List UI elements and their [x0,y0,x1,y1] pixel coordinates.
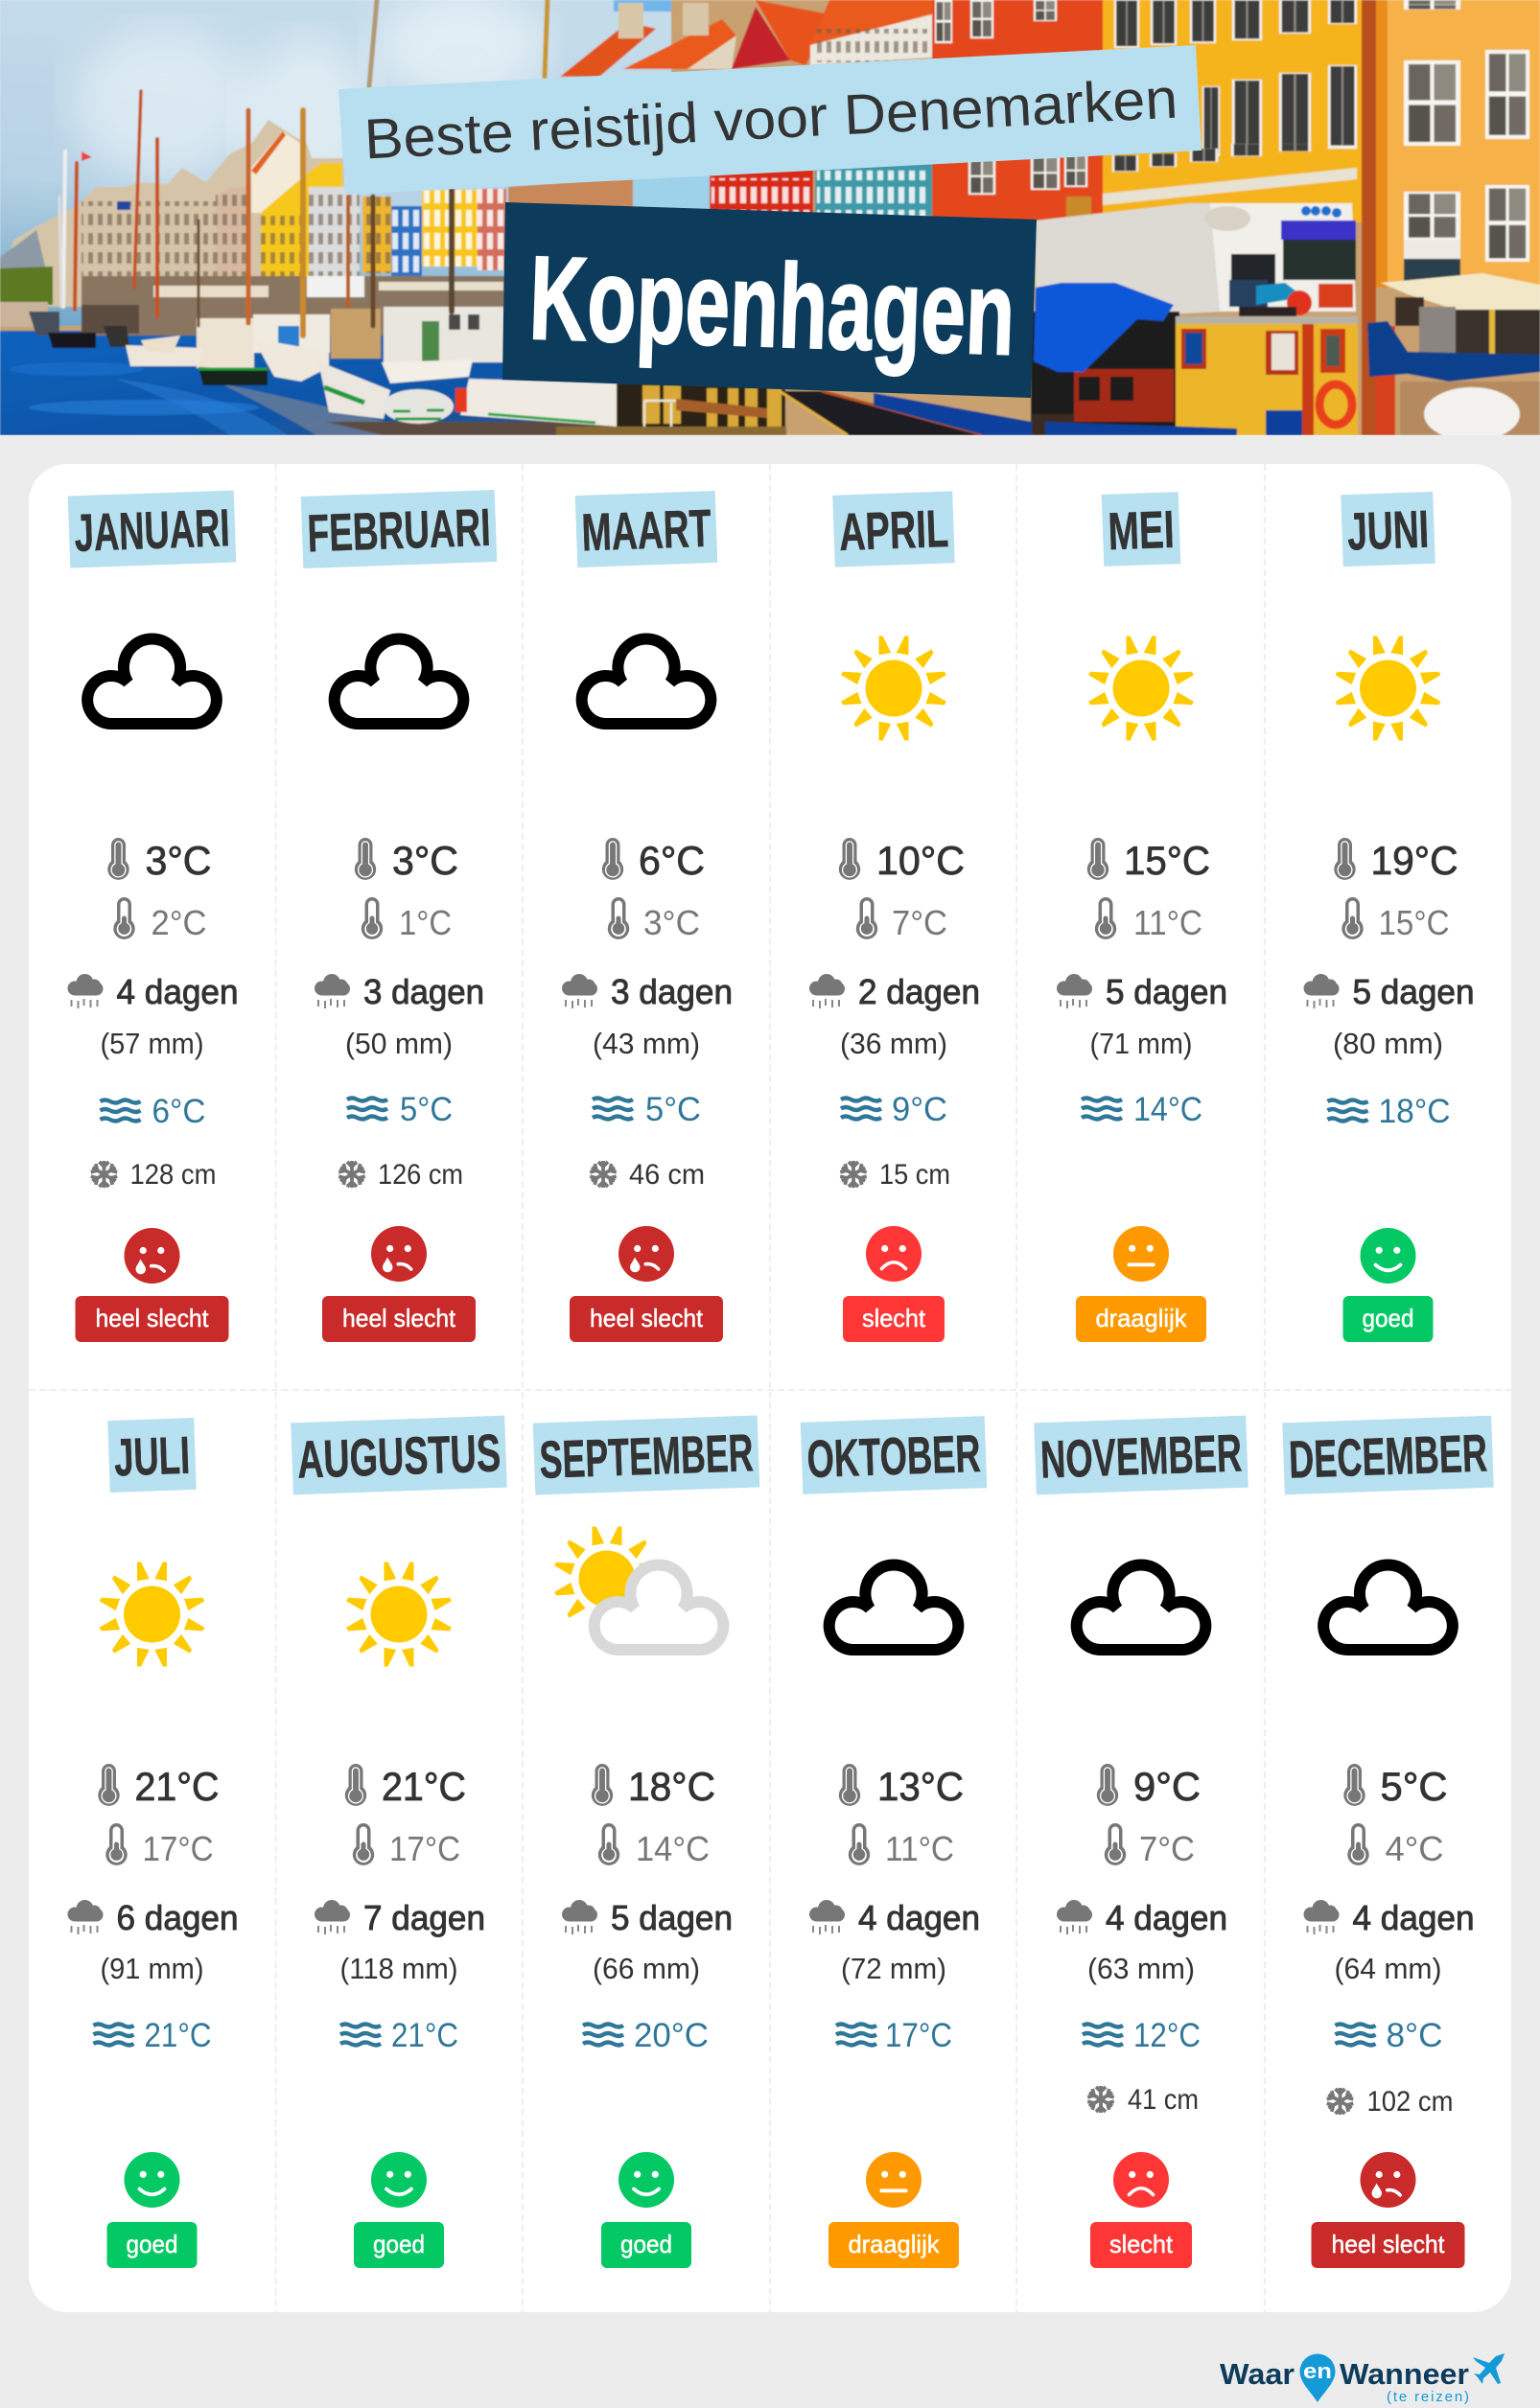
sea temperature [1083,2017,1201,2054]
low temperature [1347,1823,1444,1868]
rain days: 5 dagen [611,1898,733,1937]
low temperature [849,1823,954,1868]
rain days: 2 dagen [858,972,980,1011]
panel: september [533,1415,759,2268]
rainfall: (66 mm) [593,1952,700,1985]
rating smiley [866,1226,922,1282]
low temperature [608,897,700,942]
high temperature: 18°C [628,1764,715,1809]
sea temperature [1327,1093,1450,1130]
rainfall: (63 mm) [1087,1952,1195,1985]
low temperature: 1°C [399,903,452,942]
rain days: 3 dagen [363,972,484,1011]
high temperature: 21°C [134,1764,219,1809]
panel: april [809,491,980,1342]
logo: Waar en Wanneer: en [1303,2359,1332,2383]
panel: mei [1057,492,1227,1342]
rainfall: (80 mm) [1333,1027,1443,1060]
icon: cloud [335,639,463,724]
rain days: 4 dagen [858,1898,980,1937]
rating smiley [1360,2152,1415,2208]
low temperature: 17°C [389,1829,460,1868]
low temperature: 4°C [1385,1829,1443,1868]
rating badge [1076,1296,1206,1342]
rating badge: draaglijk [848,2230,940,2258]
title box: Kopenhagen [502,202,1037,398]
high temperature [98,1764,219,1809]
sea temperature [583,2017,709,2054]
icon: airplane [1473,2353,1505,2384]
low temperature [856,897,947,942]
rating badge: heel slecht [96,1304,209,1332]
sea temperature [1335,2017,1442,2054]
panel: februari [301,490,497,1342]
low temperature [105,1823,213,1868]
rating badge: goed [127,2230,178,2258]
heading: juli [107,1418,197,1493]
snow: 46 cm [629,1159,705,1191]
rainfall: (118 mm) [339,1952,458,1985]
icon: cloud [87,639,217,724]
heading: mei: MEI [1107,499,1176,561]
rating badge [107,2222,198,2268]
sea temperature [347,1091,453,1128]
logo: Waar en Wanneer: Waar [1220,2357,1295,2391]
rain days: 4 dagen [1106,1898,1227,1937]
rating badge [1312,2222,1465,2268]
high temperature [355,838,458,883]
sea temperature: 17°C [885,2017,952,2054]
heading: maart [575,491,717,567]
high temperature: 6°C [639,838,705,883]
icon: sun [346,1563,452,1666]
icon: cloud [829,1565,958,1650]
logo: Waar en Wanneer [1220,2353,1505,2405]
rating smiley [1360,1228,1415,1284]
rating badge [322,1296,476,1342]
rating smiley [1113,2152,1169,2208]
heading: november [1034,1416,1248,1494]
rating badge: heel slecht [1331,2230,1445,2258]
sea temperature: 8°C [1387,2017,1442,2054]
snow: 128 cm [130,1159,217,1191]
snow [839,1159,950,1191]
low temperature [113,897,207,942]
rating badge [1342,1296,1433,1342]
title ribbon: Beste reistijd voor Denemarken [338,45,1202,195]
heading: januari [68,491,236,567]
low temperature [1342,897,1450,942]
rating badge: slecht [862,1304,926,1332]
heading: juni [1341,492,1435,567]
low temperature [1095,897,1202,942]
low temperature: 14°C [636,1829,710,1868]
snow: 15 cm [879,1159,950,1191]
sea temperature: 6°C [152,1093,205,1130]
rating badge: slecht [1109,2230,1174,2258]
icon: cloud [1323,1565,1453,1650]
low temperature [598,1823,710,1868]
rain days: 4 dagen [1352,1898,1475,1937]
rain days: 7 dagen [363,1898,485,1937]
sea temperature [836,2017,952,2054]
panel: oktober [801,1416,987,2268]
high temperature: 3°C [392,838,458,883]
rating badge [1090,2222,1192,2268]
snow: 41 cm [1128,2084,1199,2116]
sea temperature: 5°C [645,1091,701,1128]
snow: 126 cm [378,1159,463,1191]
icon: sun [1336,637,1440,740]
low temperature: 11°C [1133,903,1202,942]
high temperature: 3°C [146,838,211,883]
low temperature [353,1823,460,1868]
rating smiley [125,1228,180,1284]
rating badge [828,2222,959,2268]
low temperature: 2°C [152,903,207,942]
high temperature [839,1764,964,1809]
snow [589,1159,705,1191]
snow [90,1159,217,1191]
icon: sun [100,1563,204,1666]
heading: november: NOVEMBER [1039,1423,1243,1490]
rating badge [601,2222,691,2268]
sea temperature [340,2017,458,2054]
low temperature: 7°C [892,903,947,942]
sea temperature [593,1091,701,1128]
low temperature [362,897,452,942]
high temperature [1343,1764,1448,1809]
heading: augustus: AUGUSTUS [296,1423,502,1490]
sea temperature [841,1091,947,1128]
rating smiley [618,1226,674,1282]
high temperature [602,838,705,883]
panel: december [1282,1416,1494,2268]
panel: white month card [29,464,1511,2312]
sea temperature [1082,1091,1202,1128]
high temperature [1087,838,1210,883]
heading: september: SEPTEMBER [539,1423,755,1490]
high temperature [1097,1764,1201,1809]
panel: juni [1304,492,1475,1342]
sea temperature: 21°C [144,2017,211,2054]
rating badge: heel slecht [590,1304,704,1332]
title ribbon: Beste reistijd voor Denemarken: Beste reistijd voor Denemarken [362,67,1179,171]
rain days [315,972,484,1011]
low temperature: 7°C [1139,1829,1195,1868]
low temperature [1105,1823,1195,1868]
rating badge: goed [1362,1304,1413,1332]
heading: maart: MAART [580,498,712,562]
panel: maart [562,491,733,1342]
sea temperature: 20°C [634,2017,709,2054]
logo: Waar en Wanneer: (te reizen) [1387,2389,1469,2405]
snow [338,1159,463,1191]
panel: augustus [291,1416,507,2268]
rain days: 3 dagen [611,972,733,1011]
rainfall: (43 mm) [593,1027,700,1060]
rain days: 5 dagen [1106,972,1227,1011]
rating badge: heel slecht [342,1304,456,1332]
high temperature: 13°C [877,1764,964,1809]
rating badge: goed [620,2230,672,2258]
icon: map pin [1300,2354,1335,2402]
high temperature: 9°C [1133,1764,1201,1809]
icon: sun [1088,637,1194,740]
high temperature: 15°C [1124,838,1210,883]
rating smiley [1113,1226,1169,1282]
rating smiley [371,1226,427,1282]
heading: juni: JUNI [1346,499,1430,561]
heading: mei [1102,492,1180,567]
high temperature [345,1764,466,1809]
low temperature: 15°C [1379,903,1450,942]
heading: februari [301,490,497,568]
high temperature: 21°C [382,1764,466,1809]
low temperature: 17°C [142,1829,213,1868]
rainfall: (72 mm) [841,1952,946,1985]
heading: februari: FEBRUARI [307,498,492,563]
rain days: 6 dagen [117,1898,238,1937]
icon: cloud [1077,1565,1205,1650]
snow [1086,2084,1199,2116]
panel: juli [67,1418,238,2268]
rainfall: (50 mm) [345,1027,453,1060]
heading: april [832,491,955,567]
rating badge [843,1296,945,1342]
rainfall: (57 mm) [100,1027,203,1060]
heading: juli: JULI [113,1425,191,1487]
heading: september [533,1415,759,1495]
banner photo: Nyhavn harbour [0,0,1540,441]
rating badge [570,1296,723,1342]
rain days: 4 dagen [117,972,238,1011]
high temperature [592,1764,715,1809]
heading: augustus [291,1416,507,1494]
icon: sun behind cloud [554,1526,723,1650]
high temperature [107,838,211,883]
rainfall: (91 mm) [100,1952,203,1985]
rating smiley [371,2152,427,2208]
sea temperature: 5°C [400,1091,453,1128]
high temperature: 19°C [1371,838,1458,883]
rain days: 5 dagen [1352,972,1475,1011]
rainfall: (71 mm) [1089,1027,1193,1060]
rating badge [354,2222,444,2268]
panel: januari [67,491,238,1342]
high temperature: 5°C [1381,1764,1448,1809]
snow [1326,2086,1454,2118]
sea temperature: 9°C [892,1091,947,1128]
rating smiley [618,2152,674,2208]
high temperature [839,838,965,883]
sea temperature [94,2017,211,2054]
icon: sun [841,637,946,740]
rating smiley [866,2152,922,2208]
sea temperature [100,1093,205,1130]
sea temperature: 14°C [1133,1091,1202,1128]
low temperature: 3°C [643,903,700,942]
rating badge [75,1296,228,1342]
heading: januari: JANUARI [74,498,231,563]
rainfall: (36 mm) [840,1027,947,1060]
logo: Waar en Wanneer: Wanneer [1340,2357,1469,2391]
rainfall: (64 mm) [1335,1952,1442,1985]
rating badge: goed [373,2230,425,2258]
heading: oktober [801,1416,987,1494]
sea temperature: 12°C [1133,2017,1201,2054]
heading: april: APRIL [838,498,949,562]
rating badge: draaglijk [1095,1304,1187,1332]
heading: oktober: OKTOBER [806,1424,982,1489]
high temperature: 10°C [876,838,965,883]
snow: 102 cm [1367,2086,1454,2118]
sea temperature: 21°C [391,2017,458,2054]
sea temperature: 18°C [1379,1093,1450,1130]
low temperature: 11°C [885,1829,954,1868]
panel: november [1034,1416,1248,2268]
title box: Kopenhagen: Kopenhagen [527,232,1016,381]
icon: cloud [582,639,711,724]
rating smiley [125,2152,180,2208]
high temperature [1334,838,1458,883]
